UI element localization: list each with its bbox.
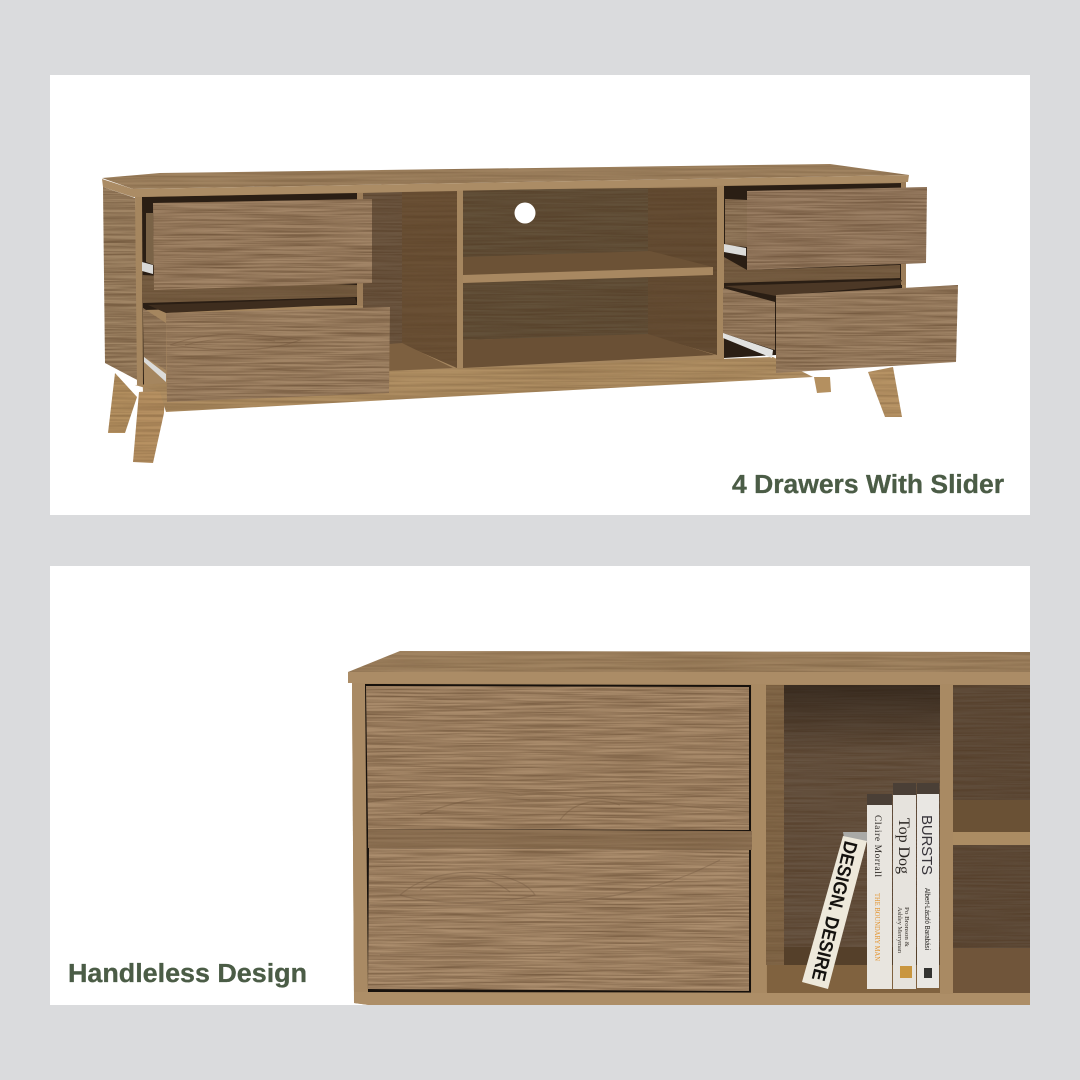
divider xyxy=(457,191,463,368)
left divider stile xyxy=(357,193,363,306)
panel: 4 drawers with slider xyxy=(50,75,1030,515)
book: Bursts: Albert-László Barabási xyxy=(923,888,930,950)
TV console: closed drawers close-up xyxy=(348,651,1030,1005)
bottom-right drawer xyxy=(723,280,958,373)
centre compartment xyxy=(463,187,717,368)
left compartment xyxy=(363,191,457,372)
book: Top Dog: Top Dog xyxy=(895,818,912,874)
top xyxy=(348,651,1030,685)
books xyxy=(802,783,939,989)
left drawer bay xyxy=(142,193,357,385)
book: The Boundary Man: THE BOUNDARY MAN xyxy=(873,893,881,961)
lower drawer front xyxy=(368,848,749,991)
book: Bursts: BURSTS xyxy=(918,815,935,875)
book: Top Dog: Po Bronson & xyxy=(903,907,910,947)
side panel xyxy=(103,187,143,383)
right drawer bay xyxy=(724,183,902,295)
carcass xyxy=(352,683,1030,1005)
TV console: open drawers xyxy=(102,164,958,463)
back legs xyxy=(108,373,831,433)
book: The Boundary Man xyxy=(867,794,892,989)
book compartment xyxy=(766,685,940,993)
book: Top Dog: Ashley Merryman xyxy=(896,907,902,953)
top-left drawer xyxy=(142,199,372,303)
front legs xyxy=(133,367,902,463)
top xyxy=(102,164,909,197)
book: Bursts xyxy=(917,783,939,988)
base band xyxy=(135,357,813,412)
left stile xyxy=(135,197,143,385)
upper drawer front xyxy=(366,686,749,830)
second divider xyxy=(940,684,953,994)
carcass interior xyxy=(135,178,906,392)
drawer bay xyxy=(365,684,751,993)
bottom band xyxy=(354,992,1030,1005)
panel: handleless design xyxy=(50,566,1030,1005)
cable hole xyxy=(514,202,536,224)
top-right drawer xyxy=(724,187,927,283)
left upright xyxy=(352,683,368,992)
caption: 4 drawers with slider: 4 Drawers With Slider xyxy=(732,471,1004,499)
bottom-left drawer xyxy=(143,298,390,402)
caption: handleless design: Handleless Design xyxy=(68,960,307,988)
divider xyxy=(752,684,766,993)
book: Design. Desire: DESIGN. DESIRE xyxy=(807,839,861,983)
centre shelf xyxy=(463,251,713,283)
right compartment xyxy=(953,685,1030,993)
gap rail xyxy=(368,829,752,850)
divider xyxy=(717,186,724,355)
book: The Boundary Man: Claire Morrall xyxy=(872,815,882,877)
right outer stile xyxy=(901,182,906,285)
book: Top Dog xyxy=(893,783,916,989)
